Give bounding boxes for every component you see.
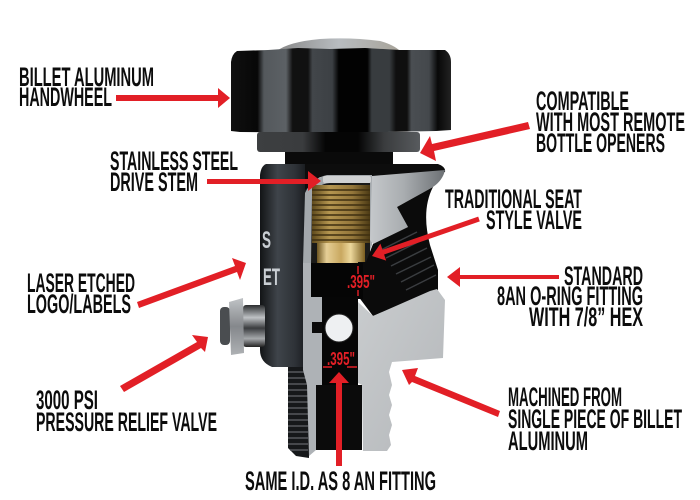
label: handwheel: HANDWHEEL	[19, 82, 112, 112]
label: drive stem: DRIVE STEM	[110, 167, 198, 197]
upper cutaway wall	[303, 175, 372, 264]
label: machined: ALUMINUM	[508, 426, 588, 456]
left aluminum wall	[303, 263, 322, 456]
arrow: relief valve	[120, 335, 208, 392]
label: valve seat: STYLE VALVE	[486, 205, 582, 235]
brass valve seat	[317, 243, 365, 263]
label: same I.D.: SAME I.D. AS 8 AN FITTING	[245, 466, 436, 496]
brass threads	[312, 185, 370, 243]
label: handwheel: BILLET ALUMINUM	[19, 62, 154, 92]
label: valve seat: TRADITIONAL SEAT	[445, 184, 582, 214]
arrow: 8AN fitting	[447, 267, 559, 287]
central bore	[311, 263, 363, 299]
angled fitting	[358, 187, 438, 316]
arrow: machined	[402, 368, 500, 417]
side port	[312, 322, 322, 333]
handwheel dome	[277, 38, 400, 51]
stainless drive stem	[323, 176, 371, 183]
top shell rim	[305, 164, 445, 190]
handwheel	[231, 48, 451, 133]
etched logo: ET	[263, 264, 280, 291]
dimension: seat bore	[347, 266, 375, 296]
dimension: lower bore: .395"	[327, 349, 355, 369]
lower mounting thread	[288, 367, 309, 458]
neck	[285, 152, 393, 164]
collar	[257, 132, 420, 152]
label: relief valve: 3000 PSI	[36, 385, 98, 415]
arrow: valve seat	[372, 217, 480, 261]
etched logo	[262, 227, 280, 291]
lower aluminum section	[358, 289, 445, 451]
valve illustration	[220, 38, 451, 458]
cross port	[325, 314, 353, 342]
label: laser etched: LOGO/LABELS	[27, 289, 131, 319]
label: relief valve: PRESSURE RELIEF VALVE	[36, 407, 217, 437]
etched logo: S	[262, 227, 271, 254]
label: drive stem: STAINLESS STEEL	[110, 146, 238, 176]
pressure relief valve	[220, 298, 265, 355]
dimension: seat bore: .395"	[347, 272, 375, 292]
arrow: remote openers	[420, 122, 530, 161]
upper aluminum section	[370, 170, 445, 244]
valve body	[260, 164, 310, 367]
dimension: lower bore	[323, 349, 357, 369]
arrow: laser etched	[137, 258, 246, 308]
arrow: same I.D.	[329, 372, 349, 466]
arrow: drive stem	[207, 171, 321, 191]
arrow: handwheel	[116, 88, 230, 108]
label: laser etched: LASER ETCHED	[27, 268, 135, 298]
